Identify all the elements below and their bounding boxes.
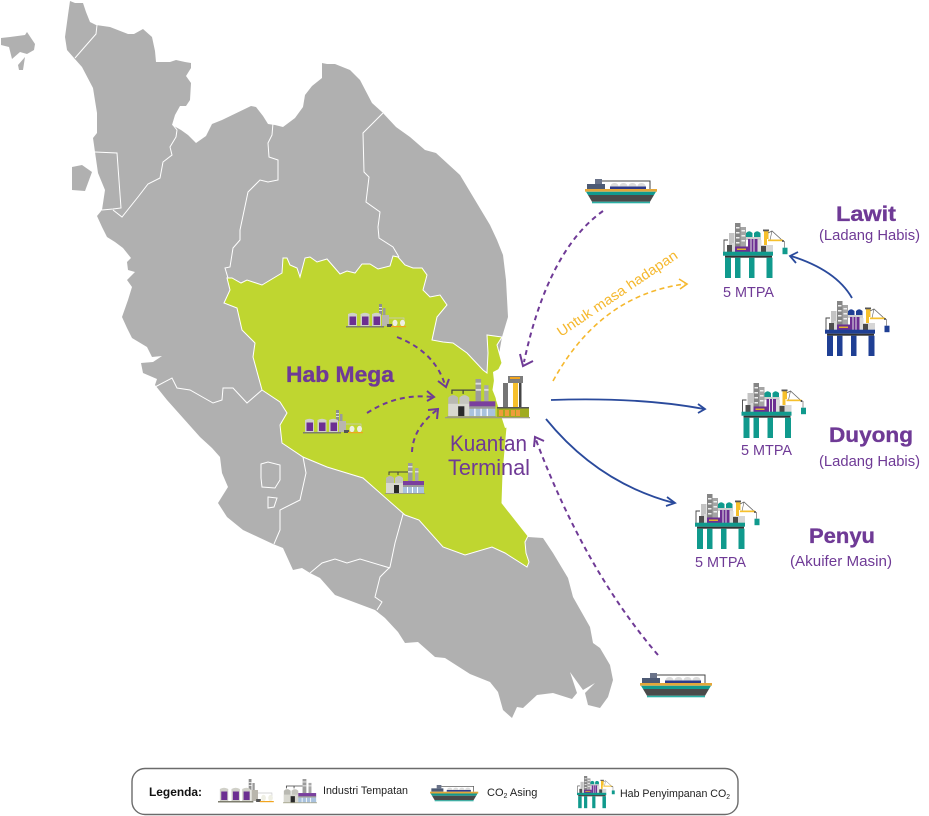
- Langkawi island: [1, 32, 35, 59]
- map: Peninsular Malaysia: [1, 1, 613, 718]
- icon: industry tanks west: [303, 410, 363, 434]
- arrow: terminal to Penyu: [546, 419, 675, 506]
- icon: ship south: [640, 673, 712, 697]
- icon: factory south: [385, 463, 425, 494]
- legend label: foreign CO2: Asing: [507, 787, 537, 799]
- small island: [18, 57, 25, 70]
- label: Duyong: Duyong: [829, 424, 913, 447]
- legend icon: ship: [430, 785, 478, 801]
- label: Duyong: 5 MTPA: [741, 442, 792, 459]
- arrow: west tanks to terminal: [367, 391, 434, 413]
- label: Kuantan Terminal: [448, 431, 530, 480]
- icon: Kuantan terminal: [445, 362, 532, 428]
- icon: Lawit platform: [723, 223, 788, 278]
- legend: [132, 768, 738, 814]
- legend icon: factory: [283, 779, 317, 803]
- arrow: north tanks to terminal: [397, 337, 449, 387]
- label: Kuantan Terminal: Terminal: [448, 455, 530, 480]
- icon: Duyong platform: [742, 383, 806, 438]
- label: Kuantan Terminal: Kuantan: [450, 431, 527, 456]
- state borders: [75, 25, 405, 610]
- Hab Mega region (green): [224, 256, 529, 567]
- arrow: future route: [553, 279, 687, 381]
- peninsula landmass: [65, 1, 613, 718]
- arrow: terminal to Duyong: [551, 399, 705, 413]
- label: Penyu: [695, 525, 892, 571]
- legend title: Legenda:: [149, 785, 202, 799]
- heading: Hab Mega: Hab Mega: [286, 362, 395, 387]
- label: Lawit: (Ladang Habis): [819, 227, 920, 244]
- label: Lawit: [723, 203, 920, 301]
- label: Duyong: (Ladang Habis): [819, 453, 920, 470]
- legend label: storage hub: 2: [726, 794, 730, 801]
- Penang island: [72, 165, 92, 191]
- arrow: south ship to terminal: [534, 437, 658, 655]
- legend label: foreign CO2: CO: [487, 787, 504, 799]
- label: Untuk masa hadapan: Untuk masa hadapan: [554, 247, 680, 339]
- legend label: storage hub: Hab Penyimpanan CO: [620, 788, 730, 800]
- legend icon: platform: [577, 776, 615, 808]
- label: Penyu: (Akuifer Masin): [790, 553, 892, 570]
- icon: ship north: [585, 179, 657, 203]
- legend label: industry: Industri Tempatan: [323, 785, 408, 797]
- label: Duyong: [741, 424, 920, 470]
- icon: industry tanks north: [346, 304, 406, 328]
- label: Lawit: Lawit: [836, 203, 896, 226]
- arrow: north ship to terminal: [520, 211, 603, 366]
- label: Penyu: Penyu: [809, 525, 875, 548]
- label: Penyu: 5 MTPA: [695, 554, 746, 571]
- legend label: foreign CO2: 2: [504, 793, 508, 800]
- icon: Penyu platform: [695, 494, 760, 549]
- arrow: factory to terminal: [412, 409, 438, 452]
- label: Lawit: 5 MTPA: [723, 284, 774, 301]
- icon: source platform blue: [825, 301, 890, 356]
- arrow: source platform to Lawit: [790, 252, 852, 298]
- legend icon: tanks: [218, 779, 274, 802]
